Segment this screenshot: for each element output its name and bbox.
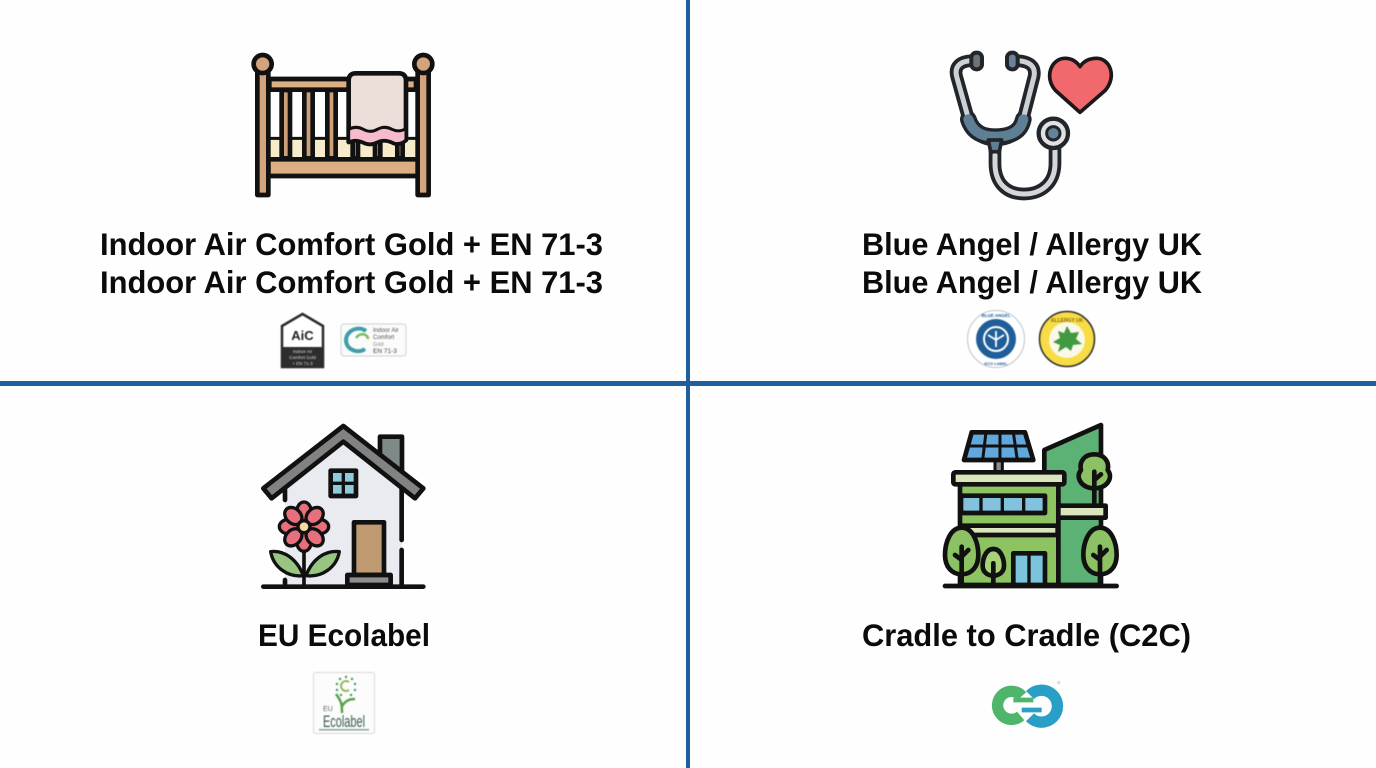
badge: AiC bbox=[282, 314, 323, 367]
heading: Blue Angel / Allergy UK bbox=[862, 226, 1202, 300]
icon: stethoscope and heart bbox=[956, 53, 1111, 194]
badge: Allergy UK bbox=[1040, 312, 1094, 366]
panel: EU Ecolabel bbox=[258, 426, 430, 734]
logo: C2C bbox=[998, 681, 1060, 722]
heading: Indoor Air Comfort Gold + EN 71-3 bbox=[100, 226, 603, 300]
badge: EN 71-3: EN 71-3 bbox=[373, 348, 397, 355]
badge: AiC: AiC bbox=[291, 328, 314, 343]
heading: Blue Angel / Allergy UK: Blue Angel / Allergy UK bbox=[862, 264, 1202, 300]
icon: house with flower bbox=[263, 426, 423, 587]
badge: AiC: Indoor Air bbox=[293, 349, 313, 354]
heading: EU Ecolabel: EU Ecolabel bbox=[258, 617, 430, 653]
panel: Indoor Air Comfort Gold + EN 71-3 bbox=[100, 55, 603, 367]
heading: Cradle to Cradle (C2C): Cradle to Cradle (C2C) bbox=[862, 617, 1191, 653]
badge: EN 71-3 bbox=[341, 324, 406, 356]
badge: EU Ecolabel bbox=[314, 672, 374, 734]
panel: Cradle to Cradle (C2C) bbox=[862, 425, 1191, 722]
badge: EN 71-3: Comfort bbox=[373, 335, 395, 341]
badge: EU Ecolabel: Ecolabel bbox=[323, 712, 365, 731]
icon: green building with solar panel bbox=[945, 425, 1117, 586]
badge: EN 71-3: Gold bbox=[373, 342, 384, 348]
panel: Blue Angel / Allergy UK bbox=[862, 53, 1202, 367]
badge: EN 71-3: Indoor Air bbox=[373, 328, 399, 334]
heading: Indoor Air Comfort Gold + EN 71-3: Indoor Air Comfort Gold + EN 71-3 bbox=[100, 226, 603, 262]
heading: Blue Angel / Allergy UK: Blue Angel / Allergy UK bbox=[862, 226, 1202, 262]
badge: Blue Angel bbox=[968, 310, 1024, 368]
badge: EU Ecolabel: EU bbox=[323, 706, 333, 713]
icon: crib bbox=[254, 55, 432, 195]
badge: AiC: Comfort Gold bbox=[289, 355, 316, 360]
badge: Allergy UK: ALLERGY UK bbox=[1051, 318, 1084, 324]
badge: Blue Angel: ECO LABEL bbox=[984, 361, 1008, 366]
heading: Indoor Air Comfort Gold + EN 71-3: Indoor Air Comfort Gold + EN 71-3 bbox=[100, 264, 603, 300]
badge: Blue Angel: BLUE ANGEL bbox=[981, 313, 1011, 318]
badge: AiC: + EN 71-3 bbox=[292, 361, 313, 366]
